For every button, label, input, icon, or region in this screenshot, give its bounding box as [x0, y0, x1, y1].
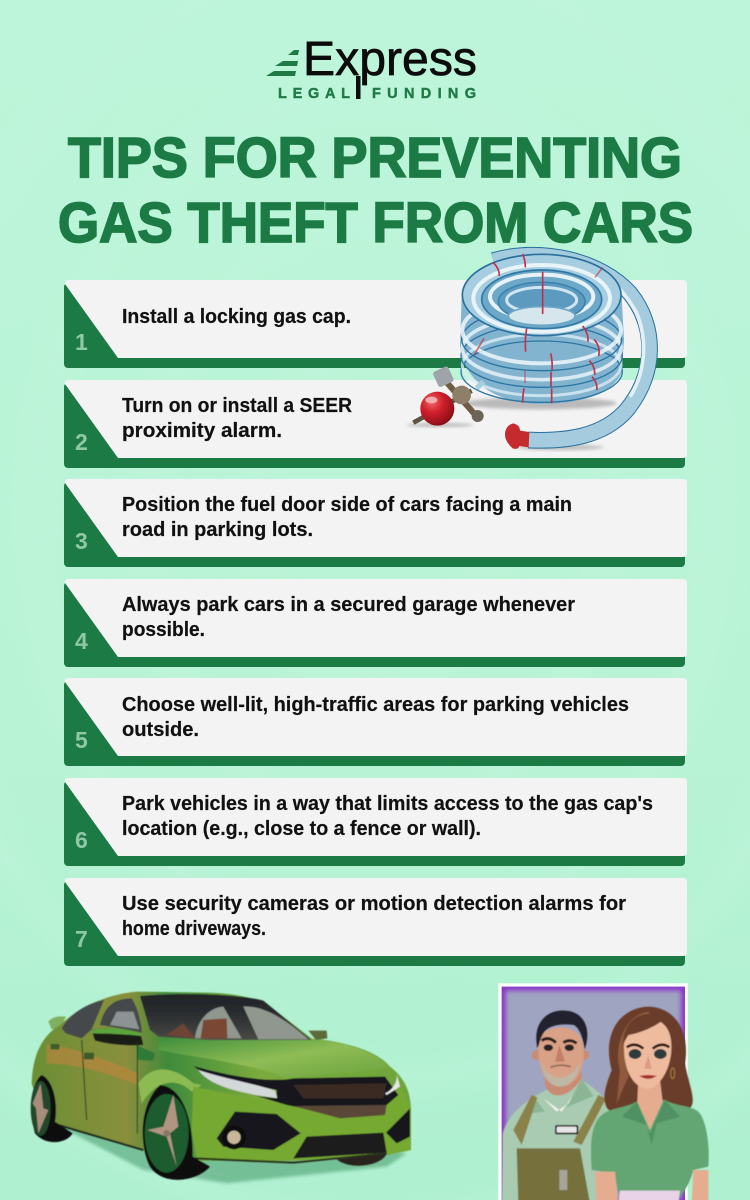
- tip 4: [64, 579, 687, 667]
- tip 3: 3: [75, 528, 88, 554]
- portrait backdrop: [502, 987, 685, 1200]
- tip 3: [64, 479, 687, 567]
- tip 2: [64, 380, 687, 468]
- portrait of two characters: [498, 983, 709, 1200]
- icon: coiled siphon hose: [407, 253, 650, 450]
- car mirror: [92, 1028, 143, 1045]
- tip 7: [64, 878, 687, 966]
- tip 7: home driveways.: [122, 918, 266, 940]
- car sill: [55, 1124, 143, 1150]
- title line 2: GAS THEFT FROM CARS: [58, 191, 693, 255]
- logo speed stripes: [266, 50, 299, 76]
- car front wheel: [143, 1085, 210, 1180]
- car rear wheel: [31, 1075, 73, 1142]
- logo p descender: [356, 76, 360, 99]
- tip 2: 2: [75, 429, 88, 455]
- tip 4: 4: [75, 628, 88, 654]
- logo legal: LEGAL: [278, 86, 350, 102]
- car side mirror far: [48, 1016, 66, 1029]
- hose red end fitting: [505, 423, 529, 449]
- car side windows: [62, 998, 142, 1038]
- tip 6: location (e.g., close to a fence or wall).: [122, 818, 481, 840]
- tip 2: Turn on or install a SEER: [122, 395, 353, 417]
- car bumper: [192, 1087, 411, 1161]
- car far wheel: [337, 1154, 387, 1166]
- tip 5: [64, 678, 687, 766]
- tip 5: 5: [75, 727, 88, 753]
- car door reflection: [47, 1045, 138, 1085]
- title: [58, 126, 693, 255]
- tip 6: Park vehicles in a way that limits access to the gas cap's: [122, 793, 653, 815]
- car body: [32, 992, 411, 1161]
- tip 3: Position the fuel door side of cars facing a main: [122, 494, 572, 516]
- tip 7: Use security cameras or motion detection alarms for: [122, 893, 626, 915]
- car front intakes: [217, 1112, 301, 1150]
- car headlight and grille: [193, 1066, 398, 1117]
- car door handles: [51, 1044, 94, 1059]
- logo: [266, 33, 477, 102]
- red hose markings: [474, 254, 603, 403]
- portrait frame: [498, 983, 688, 1200]
- tip 1: Install a locking gas cap.: [122, 306, 351, 328]
- tip 1: [64, 280, 687, 368]
- tip 5: Choose well-lit, high-traffic areas for parking vehicles: [122, 694, 629, 716]
- tip 3: road in parking lots.: [122, 519, 313, 541]
- tip 5: outside.: [122, 719, 199, 741]
- tip 6: 6: [75, 827, 88, 853]
- car windshield: [140, 994, 312, 1040]
- icon: green car: [31, 992, 411, 1183]
- logo wordmark: Express: [303, 33, 477, 86]
- tip 7: 7: [75, 926, 88, 952]
- tip 2: proximity alarm.: [122, 420, 282, 442]
- title line 1: TIPS FOR PREVENTING: [68, 126, 682, 190]
- tip 4: Always park cars in a secured garage whenever: [122, 594, 575, 616]
- tip 4: possible.: [122, 619, 205, 641]
- car hood: [158, 1038, 390, 1078]
- man figure: [502, 1011, 613, 1200]
- tip 6: [64, 778, 687, 866]
- hose tail: [493, 255, 650, 440]
- pump valve and red bulb: [413, 366, 484, 426]
- coil stack: [460, 253, 624, 404]
- car fender highlight: [138, 1070, 202, 1103]
- woman figure: [591, 1007, 709, 1200]
- logo funding: FUNDING: [372, 86, 476, 102]
- tip 1: 1: [75, 329, 88, 355]
